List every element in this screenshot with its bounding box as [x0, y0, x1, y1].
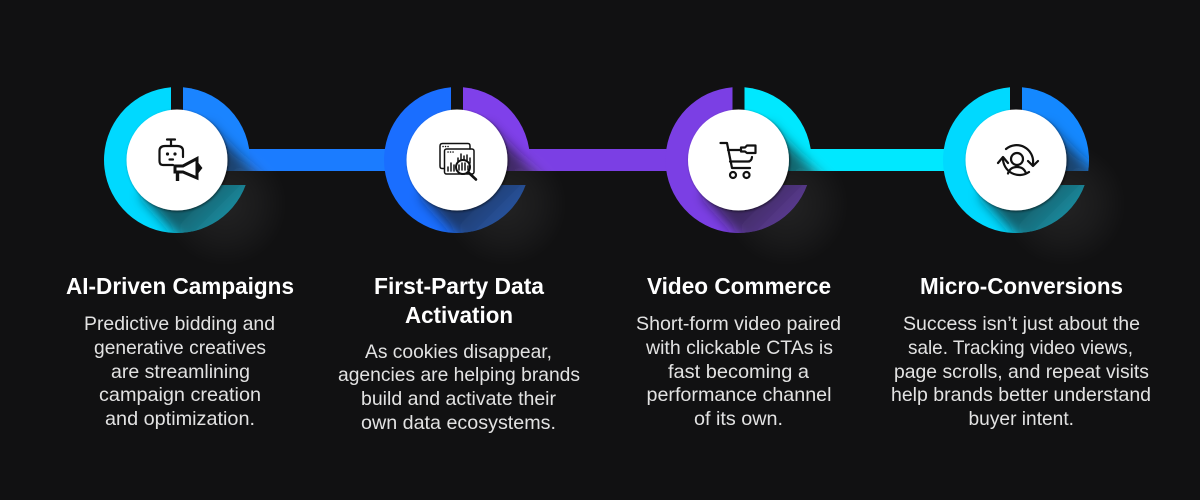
text: step 4 description: help brands better understand	[891, 384, 1151, 406]
ring: step 4	[943, 87, 1101, 241]
text: step 2 description: As cookies disappear,	[365, 341, 552, 363]
icon: user with refresh arrows	[998, 145, 1038, 175]
text: step 2 description: build and activate their	[361, 388, 557, 410]
text: step 1 description	[84, 313, 275, 430]
text: step 4 description: page scrolls, and repeat visits	[894, 361, 1149, 383]
heading: First-Party Data Activation: First-Party Data	[374, 273, 544, 299]
text: step 4 description	[891, 313, 1151, 430]
icon: robot with megaphone	[160, 140, 202, 181]
ring: step 2	[384, 87, 546, 241]
text: step 1 description: Predictive bidding and	[84, 313, 275, 335]
ring: step 3	[666, 87, 828, 241]
text: step 4 description: Success isn’t just about the	[903, 313, 1140, 335]
icon: data windows with magnifier	[440, 144, 476, 180]
text: step 3 description: with clickable CTAs is	[645, 337, 833, 359]
heading: First-Party Data Activation	[374, 273, 544, 328]
heading: First-Party Data Activation: Activation	[405, 302, 513, 328]
connector: step 2 to step 3	[457, 149, 738, 171]
text: step 1 description: are streamlining	[111, 361, 250, 383]
text: step 1 description: campaign creation	[99, 384, 261, 406]
icon: shopping cart with video camera	[720, 143, 756, 178]
connector: step 1 to step 2	[177, 149, 457, 171]
text: step 1 description: and optimization.	[105, 408, 255, 430]
text: step 3 description: fast becoming a	[668, 361, 809, 383]
heading: Micro-Conversions: Micro-Conversions	[920, 273, 1123, 299]
text: step 2 description	[338, 341, 580, 434]
text: step 4 description: sale. Tracking video views,	[908, 337, 1133, 359]
heading: AI-Driven Campaigns: AI-Driven Campaigns	[66, 273, 294, 299]
text: step 2 description: own data ecosystems.	[361, 412, 556, 434]
heading: Video Commerce: Video Commerce	[647, 273, 831, 299]
connector: step 3 to step 4	[738, 149, 1015, 171]
text: step 1 description: generative creatives	[94, 337, 266, 359]
text: step 3 description: performance channel	[646, 384, 832, 406]
ring: step 1	[104, 87, 266, 241]
text: step 4 description: buyer intent.	[968, 408, 1074, 430]
text: step 3 description: Short-form video paired	[636, 313, 841, 335]
text: step 3 description: of its own.	[694, 408, 783, 430]
text: step 2 description: agencies are helping brands	[338, 364, 580, 386]
text: step 3 description	[636, 313, 841, 430]
